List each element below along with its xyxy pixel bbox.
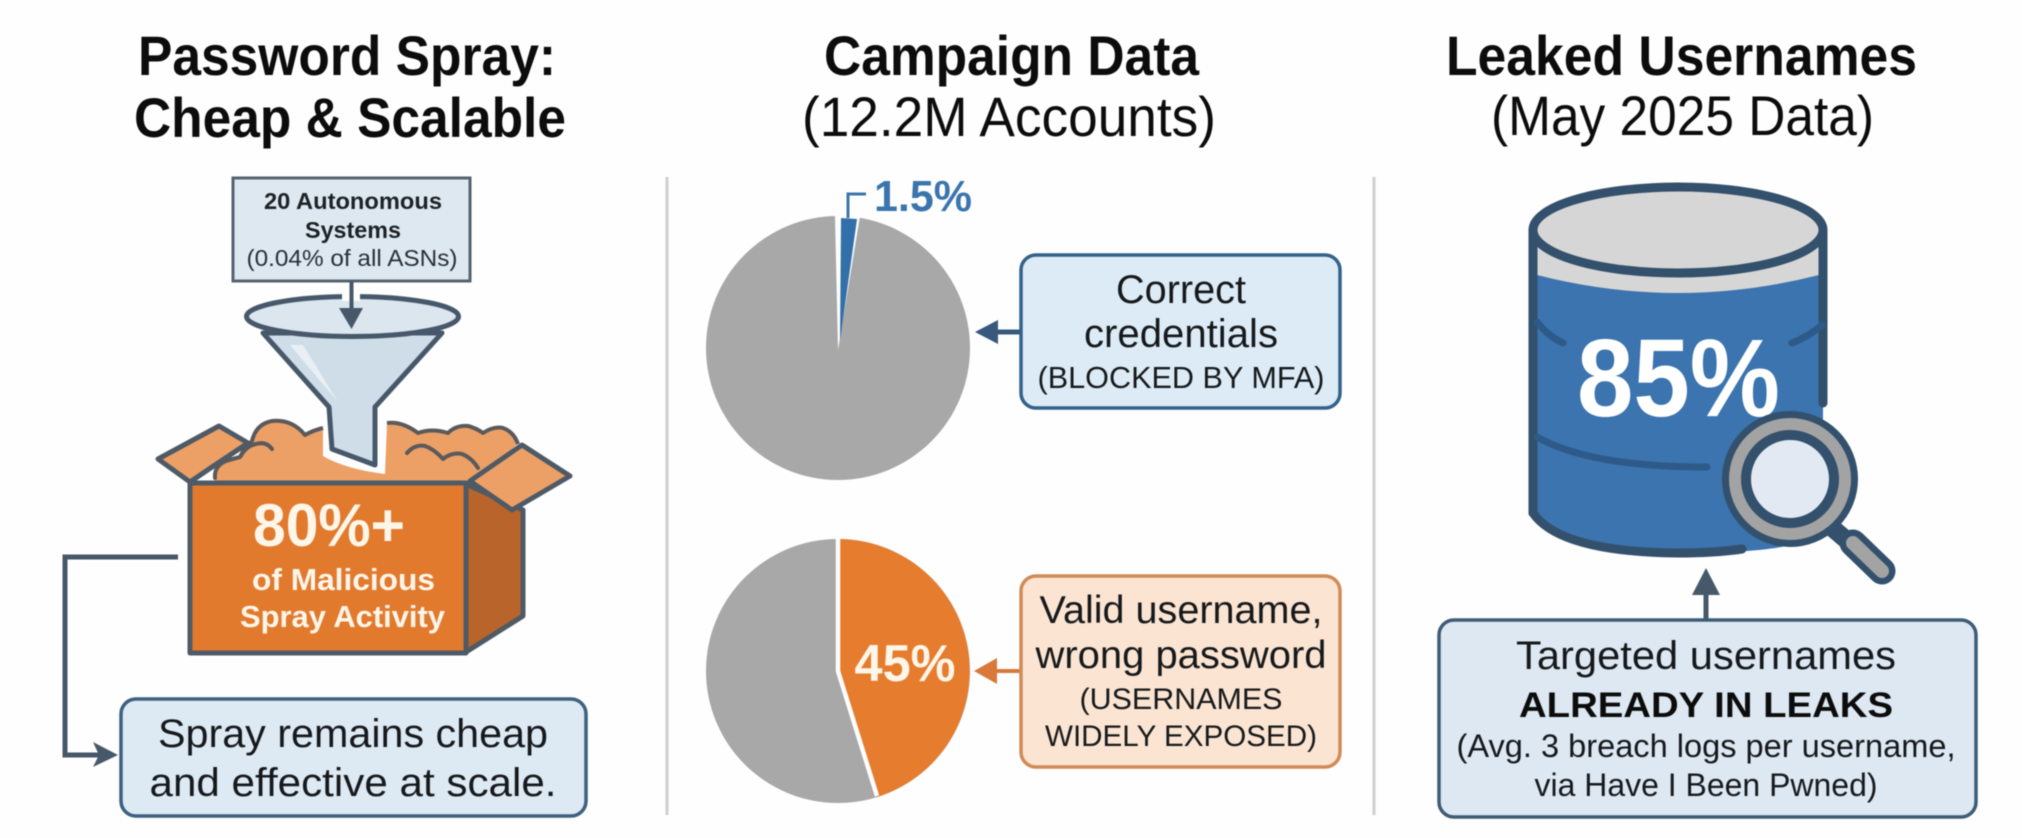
heading: leaked usernames [1446, 24, 1917, 147]
stat: 80%+ [240, 492, 446, 634]
chart: valid username pie: 45% [854, 635, 956, 693]
chart: correct credentials pie [706, 172, 972, 480]
heading: leaked usernames: Leaked Usernames [1446, 24, 1917, 87]
icon: open box [158, 421, 570, 653]
label: 1.5%: 1.5% [874, 172, 972, 221]
heading: password spray [134, 24, 566, 149]
icon: magnifying glass [1726, 414, 1882, 571]
stat: 80%+: of Malicious [252, 562, 435, 597]
callout: spray takeaway: Spray remains cheap [158, 712, 548, 756]
panel: leaked usernames [1439, 24, 1976, 817]
callout: correct credentials: (BLOCKED BY MFA) [1038, 360, 1324, 395]
icon: database cylinder: 85% [1577, 317, 1780, 440]
box: autonomous systems: 20 Autonomous [264, 188, 442, 214]
heading: campaign data: Campaign Data [824, 24, 1200, 87]
panel: password spray [65, 24, 586, 816]
icon: funnel [246, 292, 458, 465]
callout: targeted usernames [1439, 620, 1976, 817]
heading: leaked usernames: (May 2025 Data) [1491, 84, 1874, 147]
heading: password spray: Password Spray: [138, 24, 556, 87]
heading: campaign data: (12.2M Accounts) [802, 85, 1216, 148]
callout: correct credentials: Correct [1116, 268, 1246, 312]
stat: 80%+: Spray Activity [240, 599, 446, 634]
callout: spray takeaway [121, 699, 586, 816]
callout: spray takeaway: and effective at scale. [150, 761, 556, 805]
heading: password spray: Cheap & Scalable [134, 86, 566, 149]
arrow: username to pie [974, 658, 1020, 684]
callout: valid username: Valid username, [1040, 589, 1322, 632]
box: autonomous systems: (0.04% of all ASNs) [246, 245, 458, 271]
panel: campaign data [706, 24, 1340, 803]
callout: correct credentials [1021, 255, 1340, 408]
callout: valid username: wrong password [1034, 634, 1326, 677]
box: autonomous systems: Systems [305, 217, 401, 243]
arrow: credentials to pie [975, 320, 1020, 344]
heading: campaign data [802, 24, 1216, 148]
callout: targeted usernames: via Have I Been Pwned) [1534, 767, 1878, 803]
callout: targeted usernames: (Avg. 3 breach logs per username, [1456, 728, 1956, 764]
arrow: box to takeaway [65, 557, 178, 767]
callout: targeted usernames: Targeted usernames [1516, 634, 1896, 678]
callout: targeted usernames: ALREADY IN LEAKS [1519, 686, 1893, 725]
callout: valid username [1021, 576, 1340, 767]
stat: 80%+: 80%+ [253, 492, 405, 559]
callout: valid username: WIDELY EXPOSED) [1045, 720, 1317, 753]
arrow: systems into funnel [339, 281, 363, 329]
callout: correct credentials: credentials [1084, 312, 1278, 356]
arrow: box to database [1692, 568, 1720, 620]
chart: valid username pie [706, 539, 970, 803]
callout: valid username: (USERNAMES [1080, 683, 1282, 716]
box: autonomous systems [233, 178, 470, 281]
icon: database cylinder [1533, 187, 1823, 553]
